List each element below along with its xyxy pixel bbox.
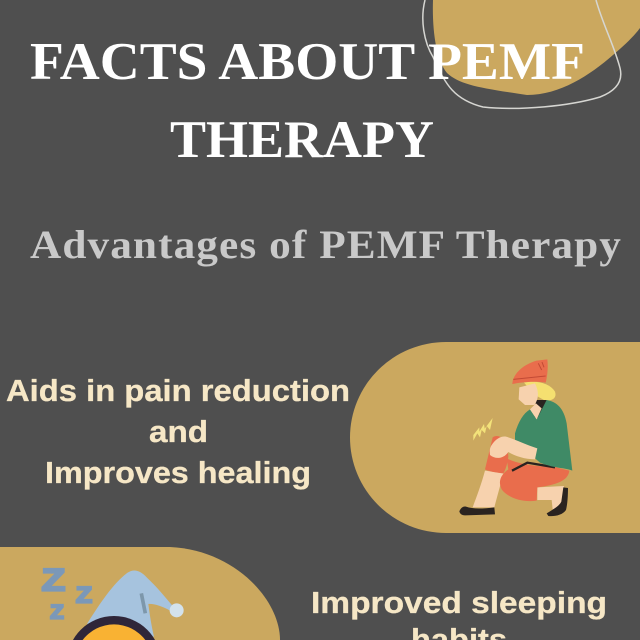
icon: woman holding knee [459, 359, 572, 516]
z letters: Z [50, 603, 64, 623]
pill background [350, 342, 640, 533]
icon: sleeping head with nightcap [42, 563, 184, 640]
panel text [311, 585, 607, 640]
title: THERAPY [170, 111, 434, 169]
panel text [6, 373, 350, 490]
panel text: and [149, 414, 208, 449]
panel text: Improves healing [45, 455, 311, 490]
decorative blob: top right [423, 0, 640, 108]
panel text: Improved sleeping [311, 585, 607, 620]
panel text: Aids in pain reduction [6, 373, 350, 408]
pill background [0, 547, 280, 640]
z letters: Z [42, 563, 65, 598]
title [30, 33, 585, 169]
z letters [42, 563, 92, 623]
subtitle: Advantages of PEMF Therapy [30, 222, 622, 267]
title: FACTS ABOUT PEMF [30, 33, 585, 91]
panel: improved sleeping [0, 547, 607, 640]
z letters: Z [76, 583, 92, 608]
panel: pain reduction [6, 342, 640, 533]
